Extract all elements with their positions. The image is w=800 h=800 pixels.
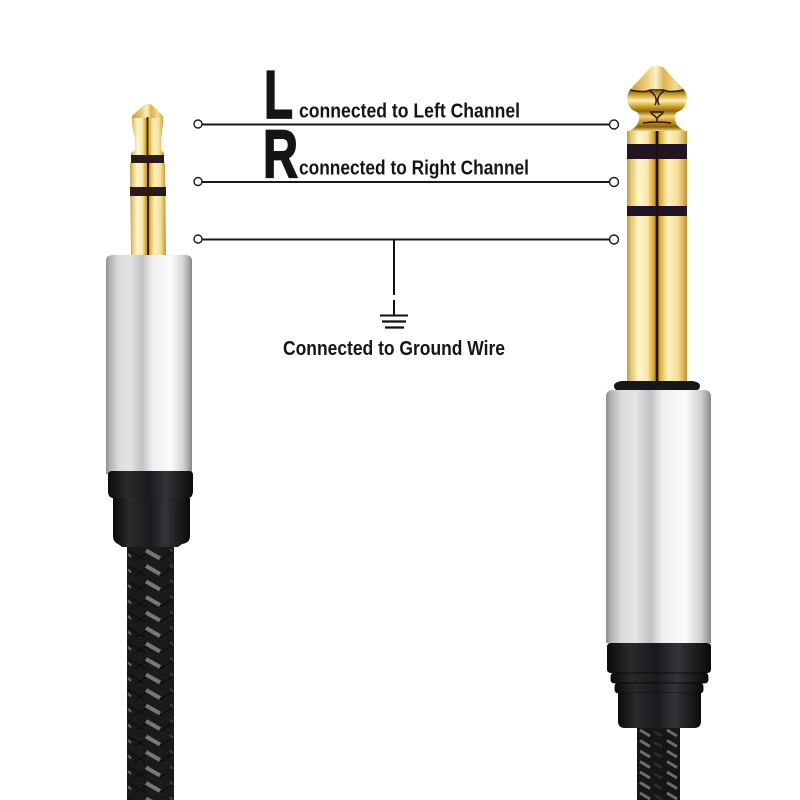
right center line: [656, 131, 658, 381]
wiring diagram: [194, 57, 618, 360]
left gold sleeve: [130, 163, 166, 255]
right silver barrel: [606, 390, 711, 643]
left black collar: [108, 471, 193, 498]
right strain relief: [618, 693, 701, 728]
left center line: [147, 163, 149, 255]
6.35mm plug (right): [606, 66, 711, 800]
left band one: [131, 155, 164, 163]
right black ring: [614, 381, 700, 391]
left silver barrel: [106, 255, 192, 474]
right channel line: [194, 178, 618, 186]
right braided cable: [637, 728, 680, 800]
left tip cone: [132, 104, 163, 118]
ground line: [194, 235, 618, 244]
letter L: L: [264, 57, 293, 133]
left gold tip shaft: [131, 117, 164, 155]
right collar ridge two: [615, 683, 703, 693]
right collar ridge one: [611, 673, 708, 683]
right tip bulb: [627, 90, 687, 131]
right channel label: connected to Right Channel: [299, 156, 529, 180]
right band one: [627, 144, 687, 159]
left strain relief: [113, 498, 190, 547]
3.5mm plug (left): [106, 104, 193, 800]
left braided cable: [127, 547, 174, 800]
right tip cone: [629, 66, 685, 91]
left channel label: connected to Left Channel: [299, 100, 520, 122]
right gold sleeve: [627, 131, 687, 381]
right black collar: [607, 643, 711, 673]
ground label: Connected to Ground Wire: [283, 337, 505, 360]
left band two: [130, 187, 166, 196]
left tip ring line: [146, 117, 148, 155]
left channel line: [194, 120, 618, 129]
right band two: [627, 206, 687, 216]
letter R: R: [263, 116, 298, 192]
right tip reflections: [630, 90, 684, 123]
icon: ground symbol: [380, 240, 408, 328]
